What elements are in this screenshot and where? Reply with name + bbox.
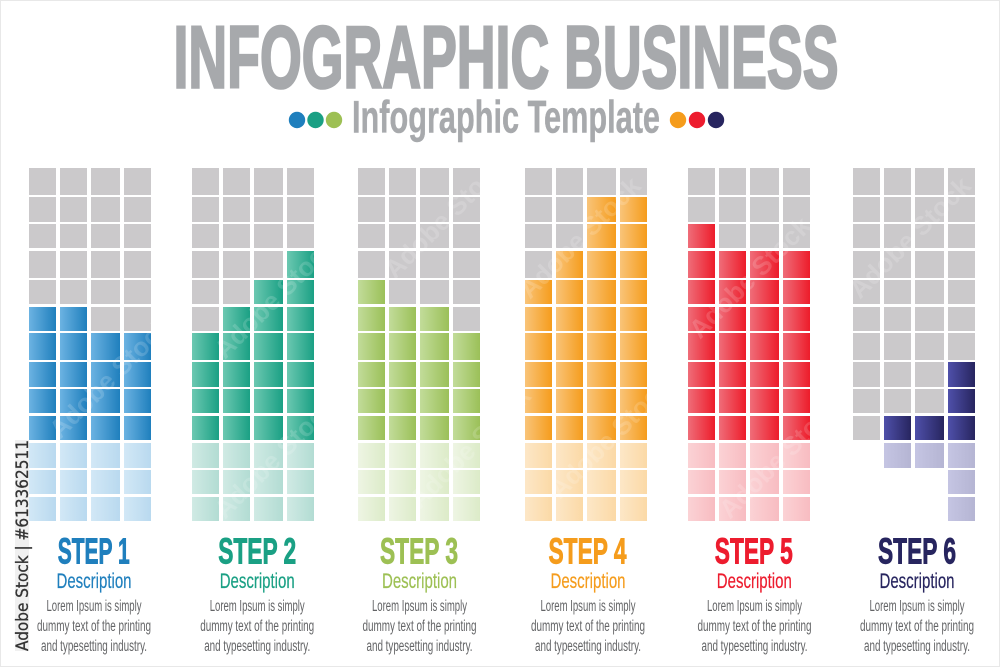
step 1 text	[37, 531, 151, 655]
faint diagonal watermarks: Adobe Stock	[43, 310, 177, 444]
step 6 text: Description	[879, 570, 954, 593]
step 6 text: STEP 6	[878, 531, 956, 572]
faint diagonal watermarks: Adobe Stock	[683, 210, 817, 344]
step 5 text: STEP 5	[714, 531, 792, 572]
step 5 text: Lorem Ipsum is simply	[707, 598, 802, 615]
step 2 text: and typesetting industry.	[204, 638, 310, 655]
step 5 text	[697, 531, 811, 655]
step 4 text: STEP 4	[548, 531, 626, 572]
panel: step 2	[192, 168, 314, 655]
chart: step 1 block column	[29, 168, 151, 521]
subtitle text: Infographic Template	[352, 92, 660, 143]
step 3 text: STEP 3	[380, 531, 458, 572]
step 5 text: Description	[716, 570, 791, 593]
faint diagonal watermarks: Adobe Stock	[513, 170, 647, 304]
step 1 text: STEP 1	[58, 531, 130, 572]
step 4 text: dummy text of the printing	[531, 618, 645, 635]
chart: step 3 block column	[358, 168, 480, 521]
panel: step 4	[525, 168, 647, 655]
right dots	[670, 112, 724, 128]
chart: step 2 block column	[192, 168, 314, 521]
step 3 text: dummy text of the printing	[362, 618, 476, 635]
left dots	[289, 112, 342, 128]
faint diagonal watermarks: Adobe Stock	[378, 150, 512, 284]
faint diagonal watermarks: Adobe Stock	[843, 170, 977, 304]
step 5 text: and typesetting industry.	[701, 638, 807, 655]
step 1 text: Lorem Ipsum is simply	[47, 598, 142, 615]
panel: step 1	[29, 168, 151, 655]
faint diagonal watermarks: Adobe Stock	[713, 390, 847, 524]
step 3 text: Description	[382, 570, 457, 593]
faint diagonal watermarks: Adobe Stock	[208, 230, 342, 364]
step 1 text: Description	[57, 570, 132, 593]
step 2 text: STEP 2	[218, 531, 296, 572]
faint diagonal watermarks: Adobe Stock	[543, 370, 677, 504]
step 3 text: Lorem Ipsum is simply	[372, 598, 467, 615]
step 2 text: Description	[220, 570, 295, 593]
step 4 text: Lorem Ipsum is simply	[540, 598, 636, 615]
step 6 text	[860, 531, 974, 655]
step 4 text: Description	[550, 570, 626, 593]
step 3 text: and typesetting industry.	[366, 638, 472, 655]
faint diagonal watermarks: Adobe Stock	[403, 380, 537, 514]
step 4 text: and typesetting industry.	[535, 638, 641, 655]
panel: step 5	[688, 168, 811, 655]
step 1 text: dummy text of the printing	[37, 618, 151, 635]
subtitle with colored dots	[288, 92, 724, 143]
stock image id label: Adobe Stock | #613362511	[13, 440, 32, 651]
panel: step 6	[853, 168, 975, 655]
step 1 text: and typesetting industry.	[41, 638, 147, 655]
step 2 text	[200, 531, 314, 655]
chart: step 5 block column	[688, 168, 810, 521]
chart: step 6 block column	[853, 168, 975, 521]
chart: step 4 block column	[525, 168, 647, 521]
faint diagonal watermarks: Adobe Stock	[208, 390, 342, 524]
panel: step 3	[358, 168, 480, 655]
step 5 text: dummy text of the printing	[697, 618, 811, 635]
step 4 text	[531, 531, 645, 655]
step 2 text: dummy text of the printing	[200, 618, 314, 635]
step 3 text	[362, 531, 476, 655]
step 2 text: Lorem Ipsum is simply	[210, 598, 305, 615]
